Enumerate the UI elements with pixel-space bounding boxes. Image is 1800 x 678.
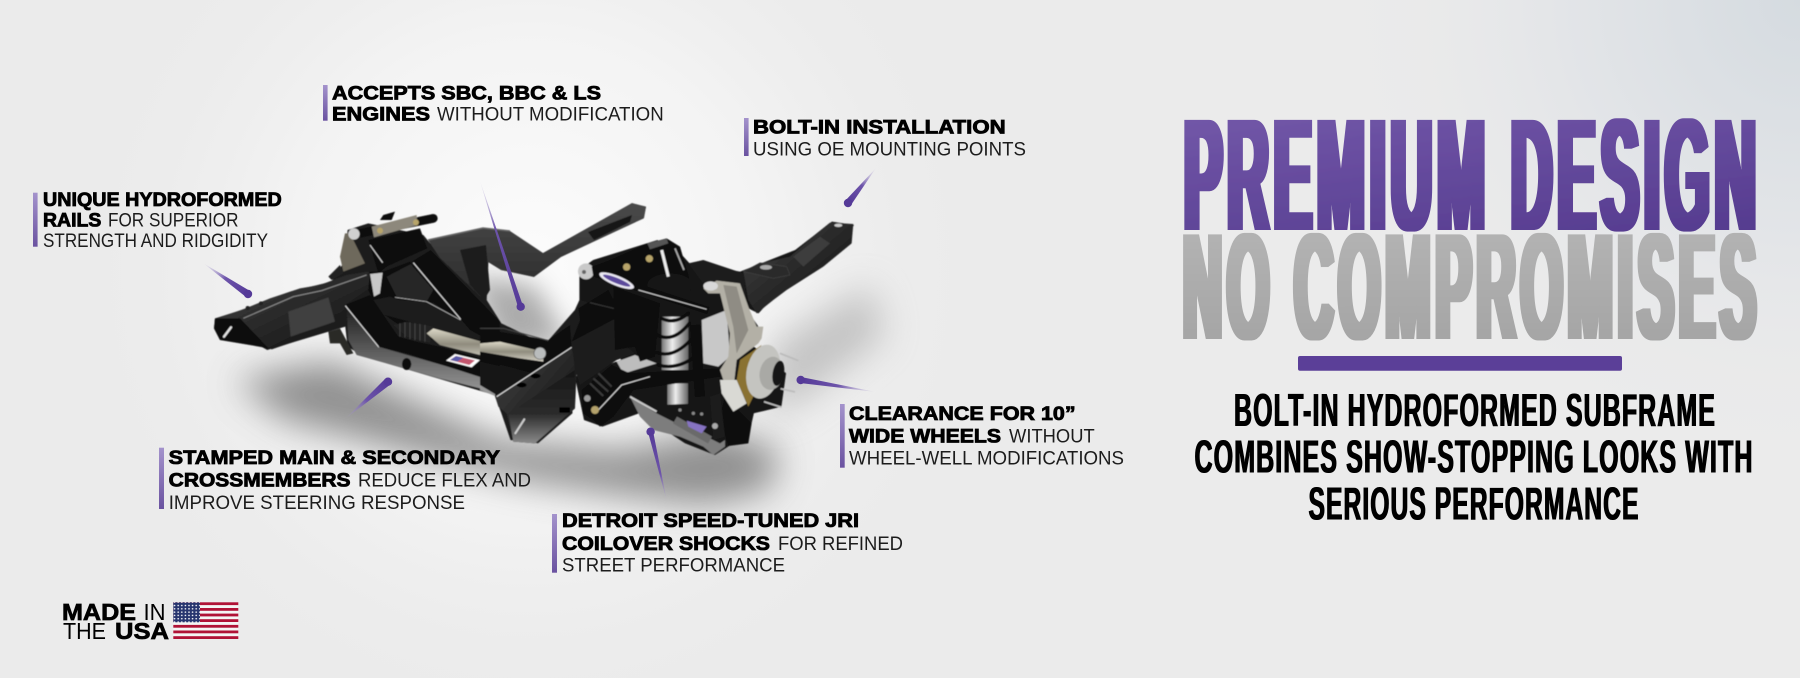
callout: accepts engines: ENGINES bbox=[332, 104, 430, 126]
upper control mount bbox=[348, 212, 438, 240]
callout: accepts engines: ACCEPTS SBC, BBC & LS bbox=[332, 82, 601, 104]
badge text: USA bbox=[115, 618, 169, 644]
callout: stamped crossmembers: REDUCE FLEX AND bbox=[358, 470, 531, 492]
callout: stamped crossmembers: CROSSMEMBERS bbox=[169, 470, 350, 492]
callout: stamped crossmembers: STAMPED MAIN & SECONDARY bbox=[169, 447, 500, 469]
callout: unique hydroformed rails: STRENGTH AND RIDGIDITY bbox=[43, 230, 268, 252]
callout: stamped crossmembers: IMPROVE STEERING RESPONSE bbox=[169, 492, 465, 514]
tower bbox=[368, 228, 427, 273]
lower control arm bbox=[630, 397, 725, 455]
badge text: IN bbox=[144, 599, 166, 625]
callout: coilover shocks: FOR REFINED bbox=[778, 533, 903, 555]
gap beside damper bbox=[702, 310, 730, 367]
callout: unique hydroformed rails: RAILS bbox=[43, 210, 101, 232]
subheading bbox=[1194, 384, 1754, 529]
knuckle bbox=[703, 281, 763, 390]
callout: clearance for wheels: WIDE WHEELS bbox=[849, 426, 1001, 448]
callout: accepts engines: WITHOUT MODIFICATION bbox=[437, 104, 664, 126]
coil tower bbox=[613, 287, 660, 362]
rear right rail bbox=[688, 223, 853, 313]
top black band bbox=[378, 337, 500, 383]
gold plate bbox=[737, 345, 762, 407]
callout: unique hydroformed rails: FOR SUPERIOR bbox=[108, 210, 238, 232]
badge bbox=[597, 269, 636, 292]
bowl bbox=[368, 262, 461, 320]
callout pointer: engines bbox=[479, 178, 525, 311]
inner channel bbox=[385, 315, 500, 357]
coil shock bbox=[662, 317, 688, 370]
steering boot bbox=[393, 322, 433, 343]
box section bbox=[345, 295, 398, 347]
left section: front rail, tower and beam bbox=[214, 228, 500, 393]
icon: american flag bbox=[173, 602, 238, 639]
upper bracket bbox=[608, 238, 692, 297]
small flag decal bbox=[446, 354, 480, 367]
callout: bolt-in installation bbox=[744, 116, 1026, 160]
frame horn bbox=[495, 348, 577, 443]
mount hardware bbox=[328, 328, 353, 355]
callout: bolt-in installation: BOLT-IN INSTALLATION bbox=[753, 116, 1006, 138]
callout: coilover shocks: DETROIT SPEED-TUNED JRI bbox=[562, 510, 859, 532]
callout: bolt-in installation: USING OE MOUNTING POINTS bbox=[753, 138, 1026, 160]
rear left rail bbox=[428, 203, 646, 300]
callout: unique hydroformed rails: UNIQUE HYDROFORMED bbox=[43, 189, 282, 211]
upper arm bbox=[595, 273, 708, 311]
callout: accepts engines bbox=[323, 82, 664, 126]
lower control assembly bbox=[582, 365, 747, 427]
callout pointer: crossmembers bbox=[345, 378, 392, 419]
callout pointer: clearance bbox=[796, 376, 876, 392]
damper rod bbox=[695, 325, 700, 397]
badge text: MADE bbox=[62, 599, 136, 625]
purple divider bar bbox=[1298, 356, 1622, 371]
subframe shadow bbox=[235, 275, 885, 505]
diagonal beam bbox=[412, 250, 500, 347]
lower shock body bbox=[667, 383, 688, 413]
badge text bbox=[62, 599, 169, 644]
hub bbox=[741, 341, 798, 407]
callout: clearance for wheels bbox=[840, 403, 1124, 470]
callout: clearance for wheels: WHEEL-WELL MODIFICATIONS bbox=[849, 448, 1124, 470]
badge text: THE bbox=[63, 618, 106, 644]
callout: clearance for wheels: CLEARANCE FOR 10” bbox=[849, 403, 1076, 425]
gap behind arms bbox=[617, 355, 657, 373]
frame silhouette bbox=[214, 203, 854, 455]
ball joint bbox=[720, 397, 752, 446]
box section bbox=[572, 313, 635, 385]
callout: unique hydroformed rails bbox=[33, 189, 282, 252]
callout: stamped crossmembers bbox=[159, 447, 531, 514]
front upper assembly bbox=[578, 238, 798, 407]
front rail bbox=[214, 272, 372, 349]
tower bracket left bbox=[340, 233, 365, 272]
callout: coilover shocks bbox=[552, 510, 903, 577]
callout: coilover shocks: STREET PERFORMANCE bbox=[562, 555, 785, 577]
callout pointer: bolt-in bbox=[844, 168, 876, 207]
callout: coilover shocks: COILOVER SHOCKS bbox=[562, 533, 770, 555]
callout pointer: coilover bbox=[646, 428, 667, 502]
made in the usa badge bbox=[62, 599, 238, 644]
illustration: bolt-in subframe bbox=[214, 203, 854, 455]
front tie-rod continuation bbox=[480, 290, 752, 455]
lower side beam bbox=[347, 305, 500, 393]
steering tube bbox=[427, 328, 500, 360]
callout pointer: hydroformed rails bbox=[203, 263, 252, 298]
callout: clearance for wheels: WITHOUT bbox=[1009, 426, 1095, 448]
